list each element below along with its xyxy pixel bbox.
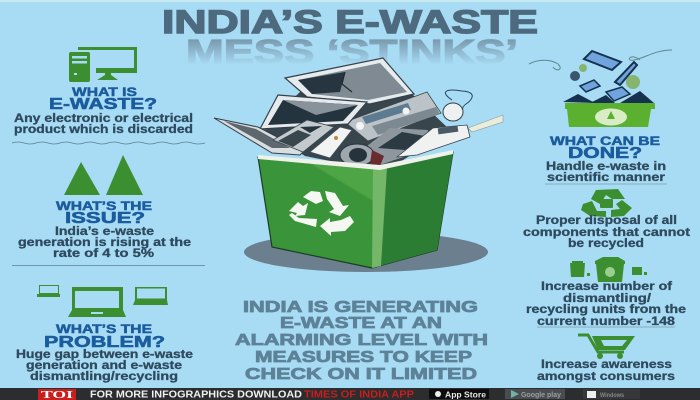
title: MESS ‘STINKS’	[186, 33, 518, 70]
action: raise awareness	[537, 335, 675, 383]
disposal text: Proper disposal of all	[536, 215, 677, 227]
open laptop screen	[260, 95, 367, 129]
cracked tablet	[285, 58, 414, 104]
icon: bin with flying gadgets	[529, 50, 672, 127]
illustration: recycle bin full of e-waste	[214, 58, 503, 272]
laptop keyboard	[214, 118, 304, 155]
icon: shopping cart	[578, 335, 635, 359]
heading: done: DONE?	[568, 145, 642, 162]
problem text: generation and e-waste	[26, 360, 182, 372]
heading: what's the: WHAT’S THE	[56, 322, 152, 336]
definition text: product which is discarded	[14, 124, 193, 136]
icon: recycle symbol	[289, 191, 354, 236]
icon: three bins	[570, 257, 647, 282]
app store badge: App Store	[445, 390, 486, 400]
action: proper disposal	[523, 189, 690, 250]
green bin body	[258, 150, 453, 268]
dark device and iron	[362, 125, 470, 165]
panel: what can be done	[529, 50, 672, 184]
center statement: MEASURES TO KEEP	[255, 349, 472, 366]
dark mass of devices	[262, 92, 450, 168]
action: more dismantling units	[526, 257, 686, 328]
windows store badge	[583, 389, 640, 399]
white game controller	[310, 127, 352, 158]
panel: what's the issue	[18, 155, 191, 260]
center statement: CHECK ON IT LIMITED	[245, 366, 477, 383]
google play badge: Google play	[521, 392, 561, 399]
dismantling text: dismantling/	[563, 293, 652, 305]
camera lens	[340, 144, 384, 166]
heading: what can be: WHAT CAN BE	[550, 134, 660, 148]
TOI logo	[38, 389, 76, 400]
definition text	[14, 113, 193, 136]
title: INDIA’S E-WASTE	[162, 4, 538, 40]
problem text: dismantling/recycling	[30, 371, 178, 383]
bin shadow	[244, 232, 488, 272]
disposal text: components that cannot	[523, 227, 690, 239]
dismantling text: recycling units from the	[526, 304, 686, 316]
radio device	[345, 92, 441, 141]
google play badge	[505, 389, 565, 399]
icon: desktop computer	[69, 47, 137, 82]
white cable mouse	[443, 90, 503, 132]
footer bar	[0, 388, 700, 400]
center statement: ALARMING LEVEL WITH	[235, 332, 488, 349]
title	[162, 4, 538, 70]
awareness text: Increase awareness	[541, 359, 672, 371]
done text: Handle e-waste in	[546, 161, 666, 173]
dismantling text: Increase number of	[541, 281, 672, 293]
heading: what is: WHAT IS	[72, 85, 137, 99]
heading: problem: PROBLEM?	[44, 334, 165, 351]
app store badge	[429, 389, 489, 400]
icon: laptops	[37, 285, 168, 317]
issue text	[18, 226, 191, 260]
center statement: E-WASTE AT AN	[280, 315, 442, 332]
heading: e-waste: E-WASTE?	[49, 96, 157, 113]
windows store badge: Windows	[600, 392, 624, 399]
disposal text: be recycled	[568, 238, 644, 250]
heading: issue: ISSUE?	[65, 210, 145, 227]
done text	[546, 161, 666, 184]
problem text	[16, 349, 193, 383]
panel: what is e-waste	[14, 47, 193, 136]
panel: what's the problem	[16, 285, 193, 383]
icon: rising triangles	[64, 155, 143, 195]
problem text: Huge gap between e-waste	[16, 349, 193, 361]
disposal text	[523, 215, 690, 250]
heading: what's the: WHAT’S THE	[56, 199, 152, 213]
calculator phone	[273, 120, 334, 152]
definition text: Any electronic or electrical	[14, 113, 193, 125]
done text: scientific manner	[547, 172, 666, 184]
issue text: India’s e-waste	[55, 226, 154, 238]
center statement: INDIA IS GENERATING	[243, 299, 478, 316]
issue text: generation is rising at the	[18, 237, 191, 249]
issue text: rate of 4 to 5%	[53, 248, 154, 260]
awareness text: amongst consumers	[537, 371, 675, 383]
icon: recycle arrows	[581, 189, 632, 217]
dismantling text	[526, 281, 686, 328]
awareness text	[537, 359, 675, 383]
center statement	[235, 299, 488, 383]
dismantling text: current number -148	[537, 316, 676, 328]
